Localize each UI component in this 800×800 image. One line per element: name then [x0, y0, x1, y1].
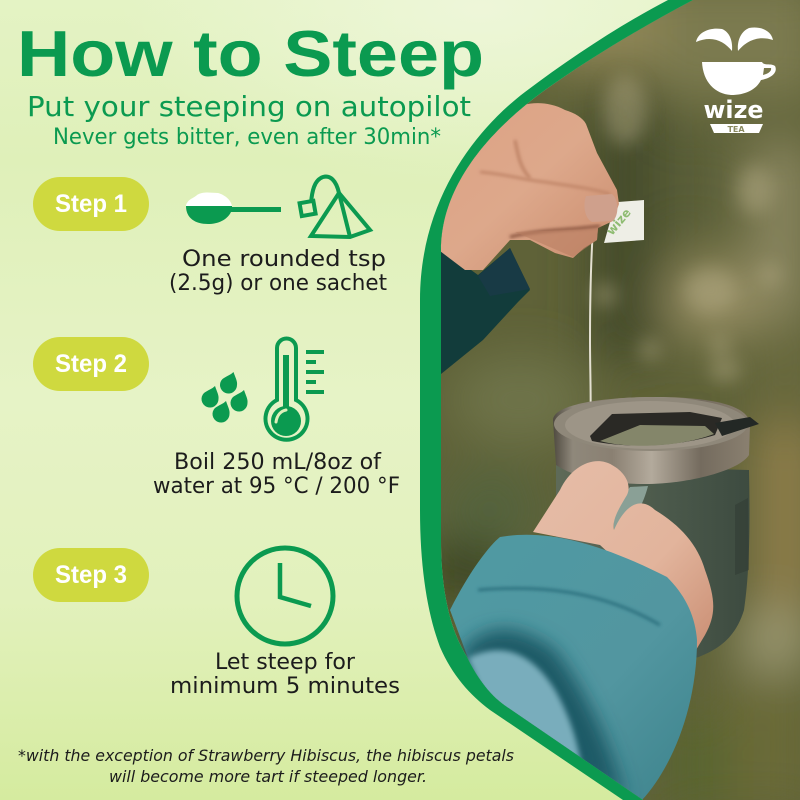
footnote: [18, 746, 514, 786]
step 3 text: minimum 5 minutes: [170, 674, 400, 699]
footnote: *with the exception of Strawberry Hibiscus, the hibiscus petals: [18, 746, 514, 765]
step 2 pill: [33, 337, 149, 391]
step 1 pill: [33, 177, 149, 231]
photo: hand dipping tea sachet into mug: [420, 0, 800, 800]
step 2 pill: Step 2: [55, 350, 127, 378]
step 1 text: (2.5g) or one sachet: [169, 271, 387, 296]
title: How to Steep: [17, 17, 484, 90]
step 2 text: water at 95 °C / 200 °F: [153, 474, 400, 499]
curved green band: [420, 0, 693, 800]
tea sachet tag: wize: [604, 206, 634, 238]
step 3 pill: [33, 548, 149, 602]
icon: water drops: [202, 372, 248, 423]
logo leaves: [696, 29, 732, 51]
step 1 text: One rounded tsp: [182, 247, 386, 272]
tea tag string: [589, 242, 594, 402]
logo band: TEA: [727, 125, 745, 134]
tagline: Never gets bitter, even after 30min*: [53, 125, 441, 150]
logo: Wize Tea: [696, 28, 776, 134]
icon: tea sachet: [300, 177, 370, 237]
logo cup: [702, 62, 776, 95]
step 1 text: [169, 247, 387, 296]
step 3 text: Let steep for: [215, 650, 356, 675]
photo background bokeh: [420, 0, 800, 800]
step 2 text: Boil 250 mL/8oz of: [174, 450, 382, 475]
icon: thermometer: [266, 338, 324, 440]
lower hand: [533, 461, 713, 655]
mug: [553, 397, 759, 660]
icon: scoop: [186, 192, 281, 224]
step 3 text: [170, 650, 400, 699]
icon: clock: [237, 548, 333, 644]
upper hand sleeve: [441, 248, 530, 374]
upper hand: [436, 103, 619, 270]
step 2 text: [153, 450, 400, 499]
teal jacket sleeve: [450, 535, 697, 800]
subtitle: Put your steeping on autopilot: [27, 90, 471, 123]
footnote: will become more tart if steeped longer.: [109, 767, 427, 786]
logo wordmark: wize: [704, 96, 764, 124]
step 3 pill: Step 3: [55, 561, 127, 589]
tea sachet tag: [604, 200, 644, 243]
step 1 pill: Step 1: [55, 190, 127, 218]
